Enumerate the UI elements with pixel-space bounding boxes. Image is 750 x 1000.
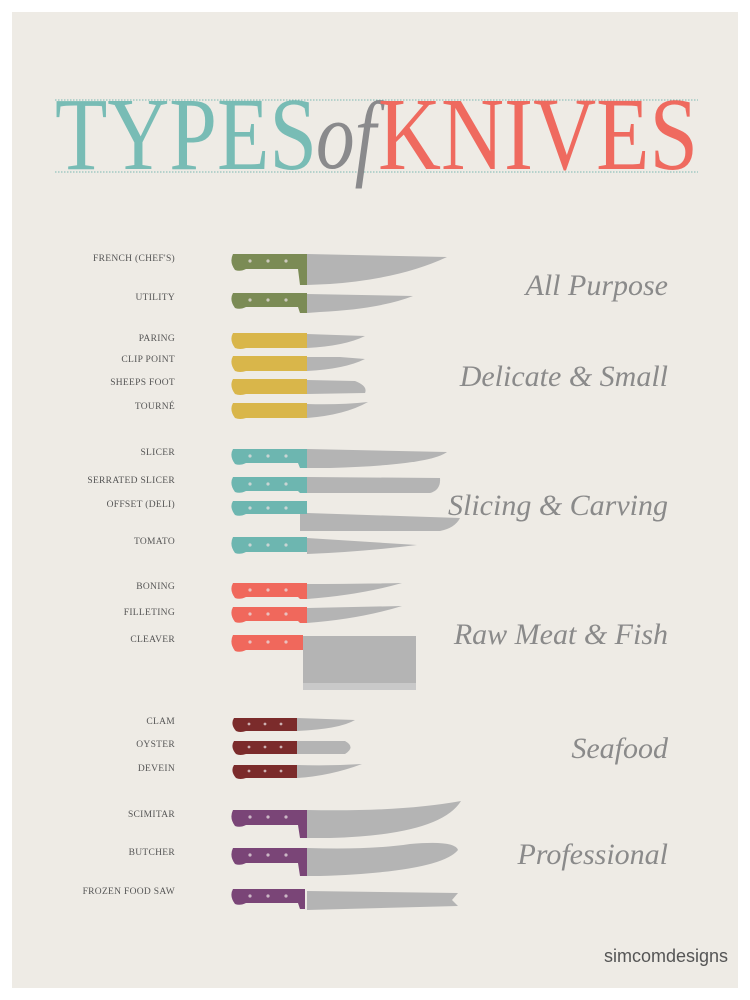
- labels: SERRATED SLICER: [87, 476, 175, 486]
- labels: TOURNÉ: [135, 400, 175, 412]
- categories: Raw Meat & Fish: [453, 618, 668, 651]
- title: TYPES: [55, 77, 317, 192]
- labels: [83, 253, 175, 897]
- knives: all purpose (green): [231, 254, 447, 313]
- categories: Professional: [516, 838, 668, 871]
- knives: delicate (yellow): [231, 333, 368, 419]
- title: [55, 77, 698, 192]
- categories: Seafood: [571, 732, 669, 765]
- labels: CLIP POINT: [121, 355, 175, 365]
- categories: All Purpose: [524, 269, 668, 302]
- labels: SHEEPS FOOT: [110, 378, 175, 388]
- labels: BONING: [136, 582, 175, 592]
- labels: TOMATO: [134, 537, 175, 547]
- labels: UTILITY: [135, 293, 175, 303]
- categories: Delicate & Small: [459, 360, 668, 393]
- watermark: simcomdesigns: [604, 946, 728, 966]
- labels: OYSTER: [136, 740, 175, 750]
- labels: DEVEIN: [138, 764, 175, 774]
- labels: FILLETING: [124, 608, 175, 618]
- knives: seafood (maroon): [232, 718, 362, 779]
- labels: SCIMITAR: [128, 810, 175, 820]
- knives: slicing (teal): [231, 449, 460, 554]
- labels: FROZEN FOOD SAW: [83, 887, 175, 897]
- title: of: [316, 82, 385, 189]
- labels: PARING: [139, 334, 175, 344]
- title: KNIVES: [378, 77, 698, 192]
- labels: CLAM: [146, 717, 175, 727]
- labels: CLEAVER: [130, 635, 175, 645]
- labels: FRENCH (CHEF'S): [93, 253, 175, 264]
- knives: raw meat (coral): [231, 583, 416, 690]
- knives: professional (purple): [231, 801, 461, 910]
- labels: SLICER: [140, 448, 175, 458]
- categories: [448, 269, 669, 871]
- categories: Slicing & Carving: [448, 489, 668, 522]
- labels: OFFSET (DELI): [107, 499, 175, 510]
- labels: BUTCHER: [129, 848, 175, 858]
